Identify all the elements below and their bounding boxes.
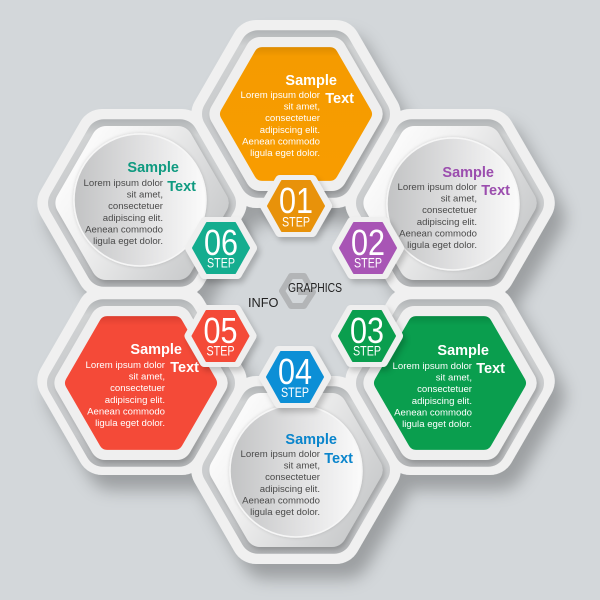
badge: step 02: 02 [351, 222, 385, 263]
text block: green panel: Text [476, 361, 505, 377]
text block: green panel: ligula eget dolor. [402, 419, 472, 430]
badge: step 03: 03 [350, 310, 384, 351]
text block: teal panel: Aenean commodo [85, 224, 163, 235]
text block: orange panel: Aenean commodo [242, 136, 320, 147]
text block: blue panel [241, 432, 353, 518]
text block: purple panel: Text [481, 183, 510, 199]
text block: green panel: Lorem ipsum dolor [393, 361, 473, 372]
text block: green panel: sit amet, [436, 373, 472, 384]
center label: GRAPHICS: GRAPHICS [288, 281, 342, 295]
text block: blue panel: sit amet, [284, 461, 320, 472]
panel: upper left hexagon with circle [66, 134, 218, 269]
panel: bottom hexagon with circle [220, 404, 372, 537]
badge: step 04: STEP [281, 385, 309, 400]
panel: lower right green hexagon [374, 317, 526, 449]
badge: step 01: 01 [279, 180, 313, 221]
badge: step 05 [190, 310, 252, 362]
badge: step 01 [265, 180, 327, 232]
badge: step 05: STEP [206, 344, 234, 358]
text block: purple panel: consectetuer [422, 205, 478, 216]
badge: step 01: STEP [282, 214, 310, 230]
center logo: hexagon G [282, 276, 313, 306]
badge: step 03: STEP [353, 344, 381, 358]
text block: blue panel: Sample [285, 432, 337, 448]
text block: red panel: ligula eget dolor. [95, 418, 165, 429]
text block: purple panel: Lorem ipsum dolor [398, 182, 478, 193]
text block: orange panel: Text [325, 91, 354, 107]
text block: red panel: Text [170, 360, 199, 376]
text block: blue panel: adipiscing elit. [260, 484, 320, 495]
text block: orange panel [241, 73, 354, 159]
badge: step 04: 04 [278, 351, 312, 392]
badge: step 02 [337, 222, 399, 274]
text block: purple panel [398, 165, 510, 251]
text block: red panel: Lorem ipsum dolor [86, 360, 166, 371]
badge: step 04 [264, 351, 326, 403]
text block: red panel: Aenean commodo [87, 406, 165, 417]
text block: orange panel: adipiscing elit. [260, 125, 320, 136]
text block: blue panel: consectetuer [265, 472, 321, 483]
text block: red panel: sit amet, [129, 372, 165, 383]
text block: teal panel: Text [167, 179, 196, 195]
text block: purple panel: sit amet, [441, 194, 477, 205]
badge: step 05: 05 [204, 310, 238, 351]
text block: teal panel: consectetuer [108, 201, 164, 212]
text block: green panel: adipiscing elit. [412, 396, 472, 407]
outer white frame of all six hexagons [62, 45, 530, 539]
badge: step 02: STEP [354, 256, 382, 270]
text block: blue panel: Text [324, 451, 353, 467]
text block: red panel: adipiscing elit. [105, 395, 165, 406]
text block: teal panel [84, 160, 196, 247]
text block: blue panel: Aenean commodo [242, 495, 320, 506]
text block: teal panel: sit amet, [127, 190, 163, 201]
text block: teal panel: Sample [127, 160, 179, 176]
panel: lower left red hexagon [65, 317, 217, 449]
text block: green panel: consectetuer [417, 384, 473, 395]
badge: step 03 [336, 310, 398, 362]
text block: purple panel: Aenean commodo [399, 228, 477, 239]
text block: orange panel: Lorem ipsum dolor [241, 90, 321, 101]
center label: INFO: INFO [248, 295, 278, 310]
text block: red panel: Sample [130, 342, 182, 358]
text block: red panel: consectetuer [110, 383, 166, 394]
text block: orange panel: Sample [285, 73, 337, 89]
badge: step 06: 06 [204, 222, 238, 263]
text block: teal panel: ligula eget dolor. [93, 236, 163, 247]
text block: purple panel: adipiscing elit. [417, 217, 477, 228]
text block: blue panel: Lorem ipsum dolor [241, 449, 321, 460]
panel: top orange hexagon [220, 48, 372, 180]
panel: upper right hexagon with circle [374, 137, 526, 270]
text block: teal panel: Lorem ipsum dolor [84, 178, 164, 189]
text block: green panel [393, 343, 505, 430]
text block: purple panel: ligula eget dolor. [407, 240, 477, 251]
badge: step 06: STEP [207, 256, 235, 270]
text block: orange panel: consectetuer [265, 113, 321, 124]
text block: green panel: Aenean commodo [394, 407, 472, 418]
text block: orange panel: ligula eget dolor. [250, 148, 320, 159]
text block: purple panel: Sample [442, 165, 494, 181]
text block: red panel [86, 342, 199, 429]
text block: teal panel: adipiscing elit. [103, 213, 163, 224]
text block: orange panel: sit amet, [284, 102, 320, 113]
badge: step 06 [190, 222, 252, 274]
text block: green panel: Sample [437, 343, 489, 359]
text block: blue panel: ligula eget dolor. [250, 507, 320, 518]
